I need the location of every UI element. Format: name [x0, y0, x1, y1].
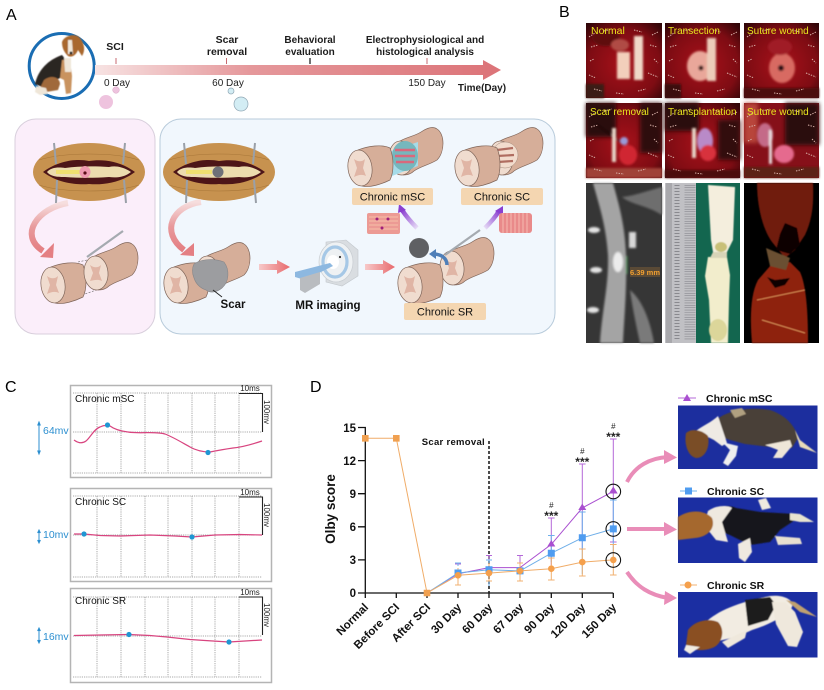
curved pink arrow: [32, 203, 68, 258]
y axis title: Olby score: [323, 474, 338, 544]
waveform: [74, 534, 262, 537]
trace label: Chronic SR: [75, 596, 126, 607]
timeline label: Electrophysiological and histological analysis: histological analysis: [376, 47, 474, 58]
legend: Chronic mSC: Chronic mSC: [706, 393, 773, 405]
x tick labels: 120 Day: [549, 601, 589, 641]
label: Chronic SR: [404, 303, 486, 320]
scar removal label: Scar removal: [422, 437, 485, 448]
label: Chronic SC: Chronic SC: [474, 192, 530, 204]
timeline label: Electrophysiological and histological analysis: Electrophysiological and: [366, 35, 484, 46]
amplitude 10mv: [38, 529, 69, 543]
x tick labels: 67 Day: [491, 601, 527, 636]
timeline label: Behavioral evaluation: evaluation: [285, 47, 335, 58]
photo: Suture wound second: [744, 103, 819, 178]
panel label: C: C: [5, 379, 17, 396]
photo: histology fluorescence: [744, 183, 819, 343]
photo: Transection: [665, 23, 740, 98]
timeline label: SCI: SCI: [106, 41, 124, 53]
arrow to chronic SR: [365, 260, 395, 274]
error bars: purple: [455, 439, 617, 575]
bubbles: pink SCI: [99, 87, 119, 109]
y tick labels: 6: [350, 522, 356, 534]
arrow to MR: [259, 260, 290, 274]
scale label 10ms: 10ms: [240, 588, 260, 597]
series: purple Chronic mSC: [427, 486, 618, 593]
scale label 100mv: 100mv: [262, 503, 271, 527]
arrow: to SC photo: [627, 522, 677, 536]
measurement label: 6.39 mm: [630, 268, 660, 277]
label: Suture wound: [747, 26, 809, 37]
spinal cord with scar: [162, 243, 250, 304]
label: MR imaging: MR imaging: [295, 300, 361, 312]
scale label 100mv: 100mv: [262, 400, 271, 424]
significance 150 day: #: [611, 422, 616, 431]
transected spinal cord: [39, 231, 138, 304]
scale label 100mv: 100mv: [262, 603, 271, 627]
scar removal marker: [488, 441, 490, 593]
scale label 10ms: 10ms: [240, 488, 260, 497]
photo: excised cord with ruler: [665, 183, 740, 343]
amplitude 64mv: [38, 422, 69, 454]
purple arrow to mSC: [398, 204, 417, 228]
series: orange Chronic SR: [362, 435, 617, 596]
x tick labels: 60 Day: [460, 601, 496, 636]
mSC cord graft: [346, 128, 443, 187]
panel label: A: A: [6, 7, 17, 24]
panel label: B: B: [559, 4, 570, 21]
scale bar: [239, 394, 262, 432]
chart: Chronic SR trace: [70, 588, 272, 682]
scale bar: [239, 497, 262, 535]
peak markers: [126, 632, 232, 645]
y tick labels: 12: [343, 456, 356, 468]
label: Chronic mSC: [352, 188, 433, 205]
significance 90 day: ***: [544, 509, 559, 523]
photo: Suture wound: [744, 23, 819, 98]
legend: Chronic SC: [680, 486, 765, 498]
photo: Transplantation: [665, 103, 740, 178]
error bars: blue: [455, 500, 617, 586]
label: Transection: [668, 26, 720, 37]
panel label: D: D: [310, 379, 322, 396]
legend: Chronic SR: Chronic SR: [707, 580, 765, 592]
arrow: to mSC photo: [627, 450, 677, 482]
curved pink arrow: [171, 202, 201, 256]
significance 90 day: #: [549, 501, 554, 510]
significance 90 day: [544, 501, 559, 523]
photo: Scar removal: [586, 103, 662, 178]
series: blue Chronic SC: [427, 525, 617, 593]
chronic SR cord with removed scar: [396, 230, 494, 304]
x tick labels: Normal: [335, 602, 371, 638]
trace label: Chronic mSC: [75, 394, 134, 405]
label: Chronic SR: Chronic SR: [417, 306, 473, 318]
label: Transplantation: [668, 107, 737, 118]
waveform: [74, 425, 262, 452]
x tick labels: After SCI: [390, 602, 433, 645]
y tick labels: 15: [343, 423, 357, 435]
photo: MRI: [586, 183, 662, 343]
timeline day: 0 Day: 0 Day: [104, 78, 130, 89]
y tick labels: 9: [350, 489, 356, 501]
y tick labels: 3: [350, 555, 356, 567]
timeline label: Behavioral evaluation: Behavioral: [284, 35, 336, 46]
photo: Chronic SR dog: [678, 592, 818, 658]
endpoint highlight circles: [606, 484, 621, 567]
SC scaffold patch: [499, 213, 532, 233]
line chart: Olby score: [323, 422, 621, 652]
mSC scaffold patch: [367, 213, 400, 234]
trace label: Chronic SC: [75, 497, 126, 508]
axis label: Time(Day): Time(Day): [458, 83, 506, 94]
panel: SCI transection: [15, 119, 155, 334]
chart: Chronic mSC trace: [70, 384, 272, 478]
x tick labels: 150 Day: [580, 601, 620, 641]
significance 120 day: ***: [575, 455, 590, 469]
significance 120 day: [575, 447, 590, 469]
scale label 10ms: 10ms: [240, 384, 260, 393]
label: Chronic mSC: Chronic mSC: [360, 192, 425, 204]
timeline label: Scar removal: Scar: [216, 34, 238, 46]
label: Suture wound: [747, 107, 809, 118]
amplitude 16mv: [38, 628, 69, 643]
SC cord graft: [453, 128, 543, 187]
icon: beagle in blue circle: [29, 34, 94, 98]
legend: Chronic SC: Chronic SC: [707, 486, 765, 498]
bubbles: blue scar removal: [228, 88, 248, 111]
timeline arrow: [95, 60, 501, 80]
purple arrow to SC: [485, 206, 503, 228]
waveform: [74, 634, 262, 642]
amplitude 10mv: 10mv: [43, 529, 69, 541]
surgical field with lesion: [33, 143, 145, 203]
legend: Chronic SR: [680, 580, 765, 592]
label: Scar: Scar: [221, 299, 246, 311]
x tick labels: [335, 601, 620, 652]
significance 150 day: [606, 422, 621, 444]
photo: Chronic SC dog: [678, 498, 818, 563]
arrow: to SR photo: [627, 572, 677, 605]
timeline label: Scar removal: removal: [207, 46, 247, 58]
photo: Chronic mSC dog: [678, 406, 818, 469]
significance 120 day: #: [580, 447, 585, 456]
y tick labels: [343, 423, 357, 600]
scale bar: [239, 597, 262, 635]
x tick labels: Before SCI: [352, 602, 402, 652]
label: Scar removal: [590, 107, 649, 118]
amplitude 64mv: 64mv: [43, 425, 69, 437]
icon: MR scanner: [295, 240, 358, 293]
y tick labels: 0: [350, 588, 356, 600]
peak markers: [81, 531, 195, 540]
timeline day: 150 Day: 150 Day: [408, 78, 446, 89]
x tick labels: 90 Day: [522, 601, 558, 636]
label: Normal: [591, 25, 625, 37]
timeline tick marks: [116, 58, 427, 64]
timeline day: 60 Day: 60 Day: [212, 78, 244, 89]
error bars: orange: [455, 544, 617, 585]
x tick labels: 30 Day: [429, 601, 465, 636]
surgical field with scar: [163, 143, 275, 203]
peak markers: [105, 422, 211, 455]
amplitude 16mv: 16mv: [43, 631, 69, 643]
axes and ticks: [358, 428, 613, 598]
label: Chronic SC: [461, 188, 543, 205]
panel: chronic repair workflow: [160, 119, 555, 334]
significance 150 day: ***: [606, 430, 621, 444]
photo: Normal: [586, 23, 662, 98]
chart: Chronic SC trace: [70, 488, 272, 582]
